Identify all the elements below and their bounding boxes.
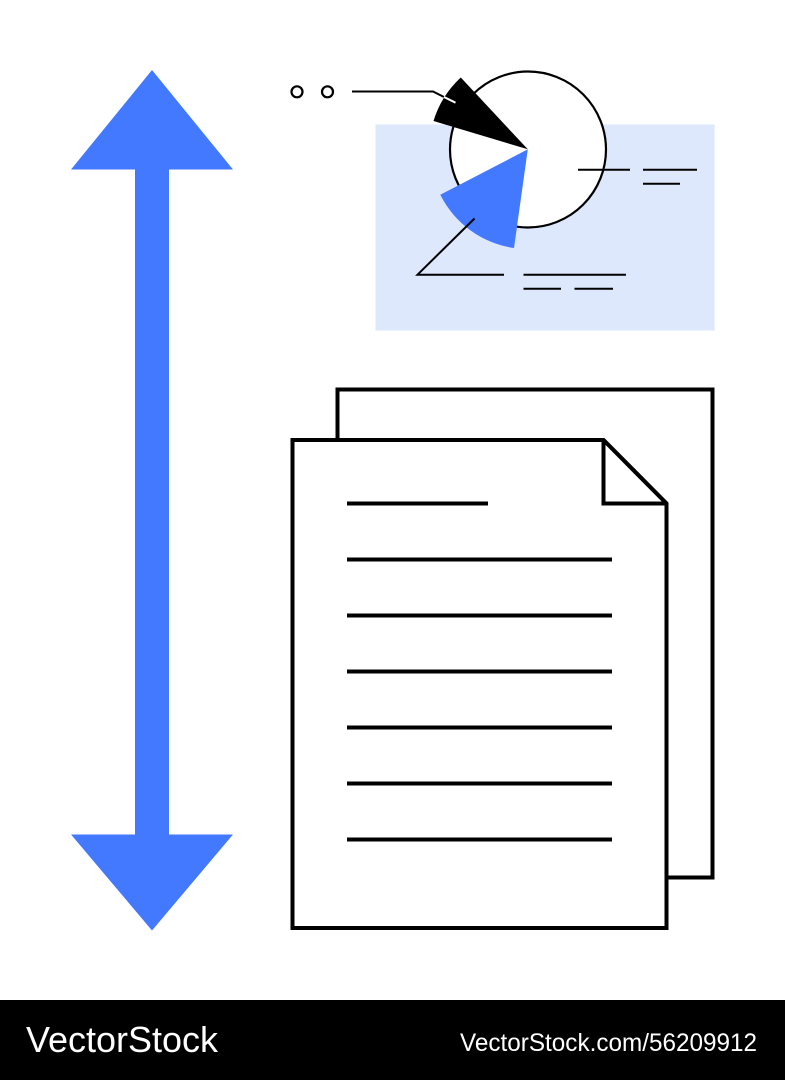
icon: double-headed vertical arrow (71, 70, 233, 930)
footer logo text: VectorStock (26, 1019, 219, 1060)
footer url text: VectorStock.com/56209912 (460, 1029, 757, 1057)
callout: right label lines (578, 170, 697, 184)
pie chart (434, 72, 606, 248)
callout: blue slice leader and label lines (418, 218, 626, 289)
icon: stacked documents (292, 390, 712, 928)
callout: black slice leader line (352, 92, 456, 103)
legend dots (292, 86, 333, 97)
pie slice: black (434, 78, 528, 149)
footer bar (0, 1000, 785, 1080)
panel: pie chart backdrop (376, 124, 714, 330)
page fold (604, 440, 666, 504)
front page (292, 440, 666, 928)
pie circle (450, 72, 606, 228)
back page (338, 390, 712, 878)
document text lines (347, 504, 612, 840)
pie slice: blue (440, 149, 528, 248)
